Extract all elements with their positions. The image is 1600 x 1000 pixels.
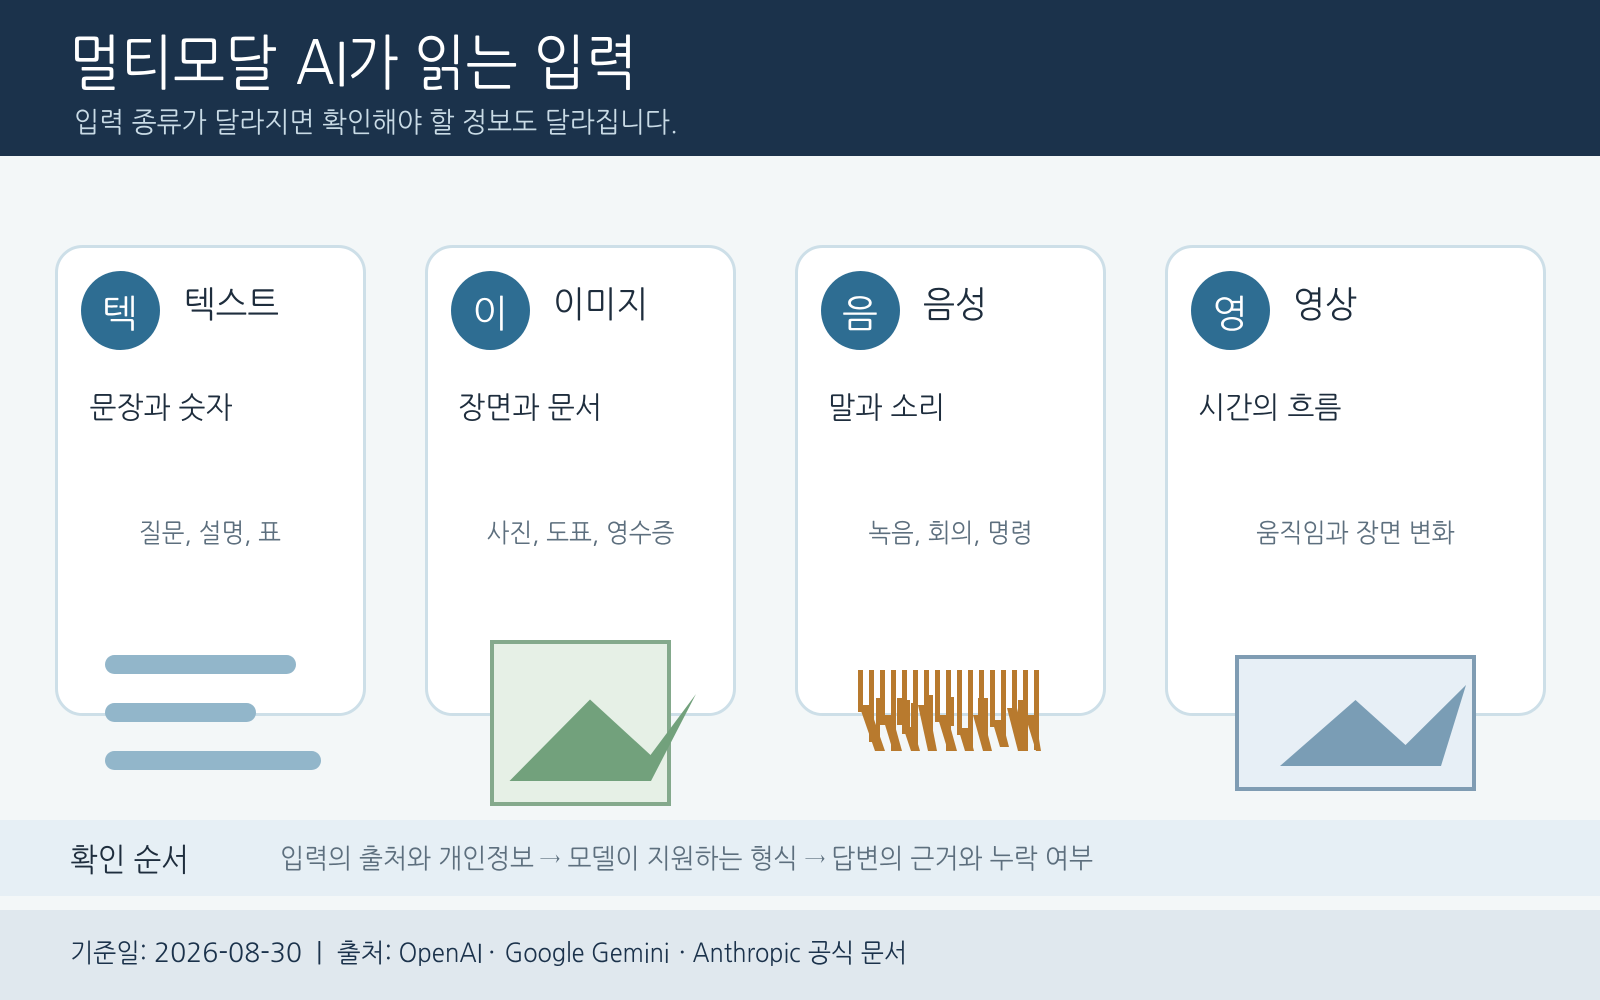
illustration: photo with mountain xyxy=(492,642,696,804)
card heading: audio: 음성 xyxy=(923,287,987,323)
card subheading: audio: 말과 소리 xyxy=(828,393,945,423)
icon: audio badge: 음 xyxy=(842,295,878,333)
source line: 공식 문서 xyxy=(808,940,907,966)
source line: Google Gemini xyxy=(504,940,670,966)
card subheading: video: 시간의 흐름 xyxy=(1198,393,1342,423)
card examples: audio: 녹음, 회의, 명령 xyxy=(868,520,1032,546)
illustration: text lines xyxy=(105,655,321,770)
title xyxy=(69,33,638,93)
panel: image card xyxy=(426,246,734,804)
source line: 2026-08-30 xyxy=(154,940,302,966)
panel: text card xyxy=(56,246,364,770)
band sequence text: 모델이 지원하는 형식 xyxy=(568,845,798,872)
card heading: video: 영상 xyxy=(1293,287,1357,323)
band sequence text: 답변의 근거와 누락 여부 xyxy=(831,845,1093,872)
card examples: video: 움직임과 장면 변화 xyxy=(1256,520,1455,546)
band sequence text xyxy=(280,845,1093,872)
source line: 기준일: xyxy=(70,940,147,966)
title: 멀티모달 xyxy=(69,33,277,93)
panel: video card xyxy=(1166,246,1544,789)
icon: text badge xyxy=(81,271,160,350)
footer xyxy=(0,910,1600,1000)
band sequence text: → xyxy=(805,845,825,872)
card examples: text: 질문, 설명, 표 xyxy=(139,520,281,546)
band heading: 확인 순서 xyxy=(70,844,189,876)
source line: OpenAI xyxy=(398,940,482,966)
band sequence text: 입력의 출처와 개인정보 xyxy=(280,845,534,872)
source line: 출처: xyxy=(337,940,392,966)
subtitle: 입력 종류가 달라지면 확인해야 할 정보도 달라집니다. xyxy=(74,108,678,137)
source line: | xyxy=(316,940,322,966)
source line: Anthropic xyxy=(692,940,800,966)
panel: check order band xyxy=(0,820,1600,896)
card examples: image: 사진, 도표, 영수증 xyxy=(486,520,674,546)
source line xyxy=(70,940,907,966)
card subheading: image: 장면과 문서 xyxy=(458,393,602,423)
band sequence text: → xyxy=(540,845,560,872)
title: 읽는 입력 xyxy=(414,33,638,93)
illustration: video frame xyxy=(1237,657,1474,789)
card heading: text: 텍스트 xyxy=(184,287,279,323)
icon: video badge: 영 xyxy=(1212,295,1248,333)
source line: · xyxy=(678,940,686,966)
icon: image badge: 이 xyxy=(472,295,508,333)
icon: text badge: 텍 xyxy=(102,295,138,333)
panel: audio card xyxy=(796,246,1104,751)
icon: image badge xyxy=(451,271,530,350)
title: AI가 xyxy=(296,33,398,93)
illustration: waveform xyxy=(858,670,1041,751)
card heading: image: 이미지 xyxy=(553,287,648,323)
source line: · xyxy=(488,940,496,966)
card subheading: text: 문장과 숫자 xyxy=(90,393,232,423)
header band xyxy=(0,0,1600,156)
icon: audio badge xyxy=(821,271,900,350)
icon: video badge xyxy=(1191,271,1270,350)
